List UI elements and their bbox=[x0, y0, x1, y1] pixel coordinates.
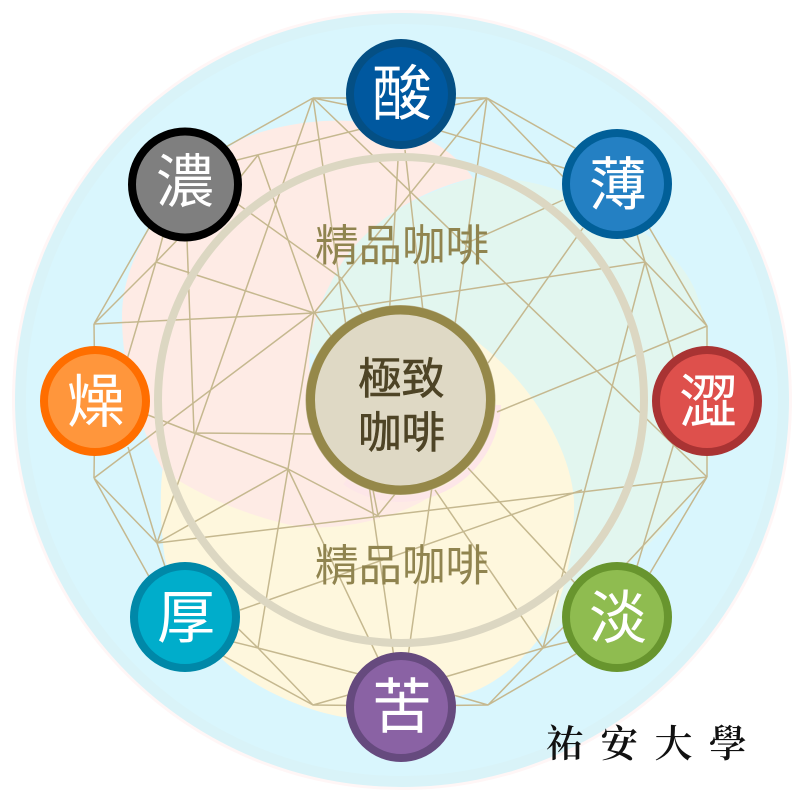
centre circle: ultimate coffee bbox=[306, 305, 496, 495]
node: dry bbox=[44, 350, 146, 452]
node: rich bbox=[132, 132, 238, 238]
node: light bbox=[566, 566, 668, 668]
node: thin: 薄 bbox=[589, 153, 647, 218]
swirl blob: yellow bbox=[161, 337, 574, 720]
label: lower specialty coffee: 精品咖啡 bbox=[315, 543, 489, 591]
large ring bbox=[158, 157, 644, 643]
node: sour bbox=[350, 43, 452, 145]
swirl blob: green bbox=[305, 178, 714, 640]
node: light: 淡 bbox=[589, 586, 647, 651]
connection network bbox=[94, 98, 707, 706]
node: thick: 厚 bbox=[157, 586, 215, 651]
node: astringent bbox=[656, 350, 758, 452]
pink halo around centre bbox=[345, 405, 498, 499]
node: thin bbox=[566, 133, 668, 235]
swirl blob: pink bbox=[122, 121, 473, 528]
node: bitter bbox=[350, 656, 452, 758]
node: astringent: 澀 bbox=[679, 370, 737, 435]
node: dry: 燥 bbox=[67, 370, 125, 435]
label: upper specialty coffee: 精品咖啡 bbox=[315, 223, 489, 271]
node: thick bbox=[134, 566, 236, 668]
logo: university name: 祐安大學 bbox=[546, 724, 763, 766]
node: bitter: 苦 bbox=[372, 674, 432, 741]
node: rich: 濃 bbox=[156, 150, 214, 215]
centre circle: ultimate coffee: 極致 bbox=[358, 356, 445, 404]
node: sour: 酸 bbox=[372, 61, 432, 128]
centre circle: ultimate coffee: 咖啡 bbox=[358, 410, 445, 458]
